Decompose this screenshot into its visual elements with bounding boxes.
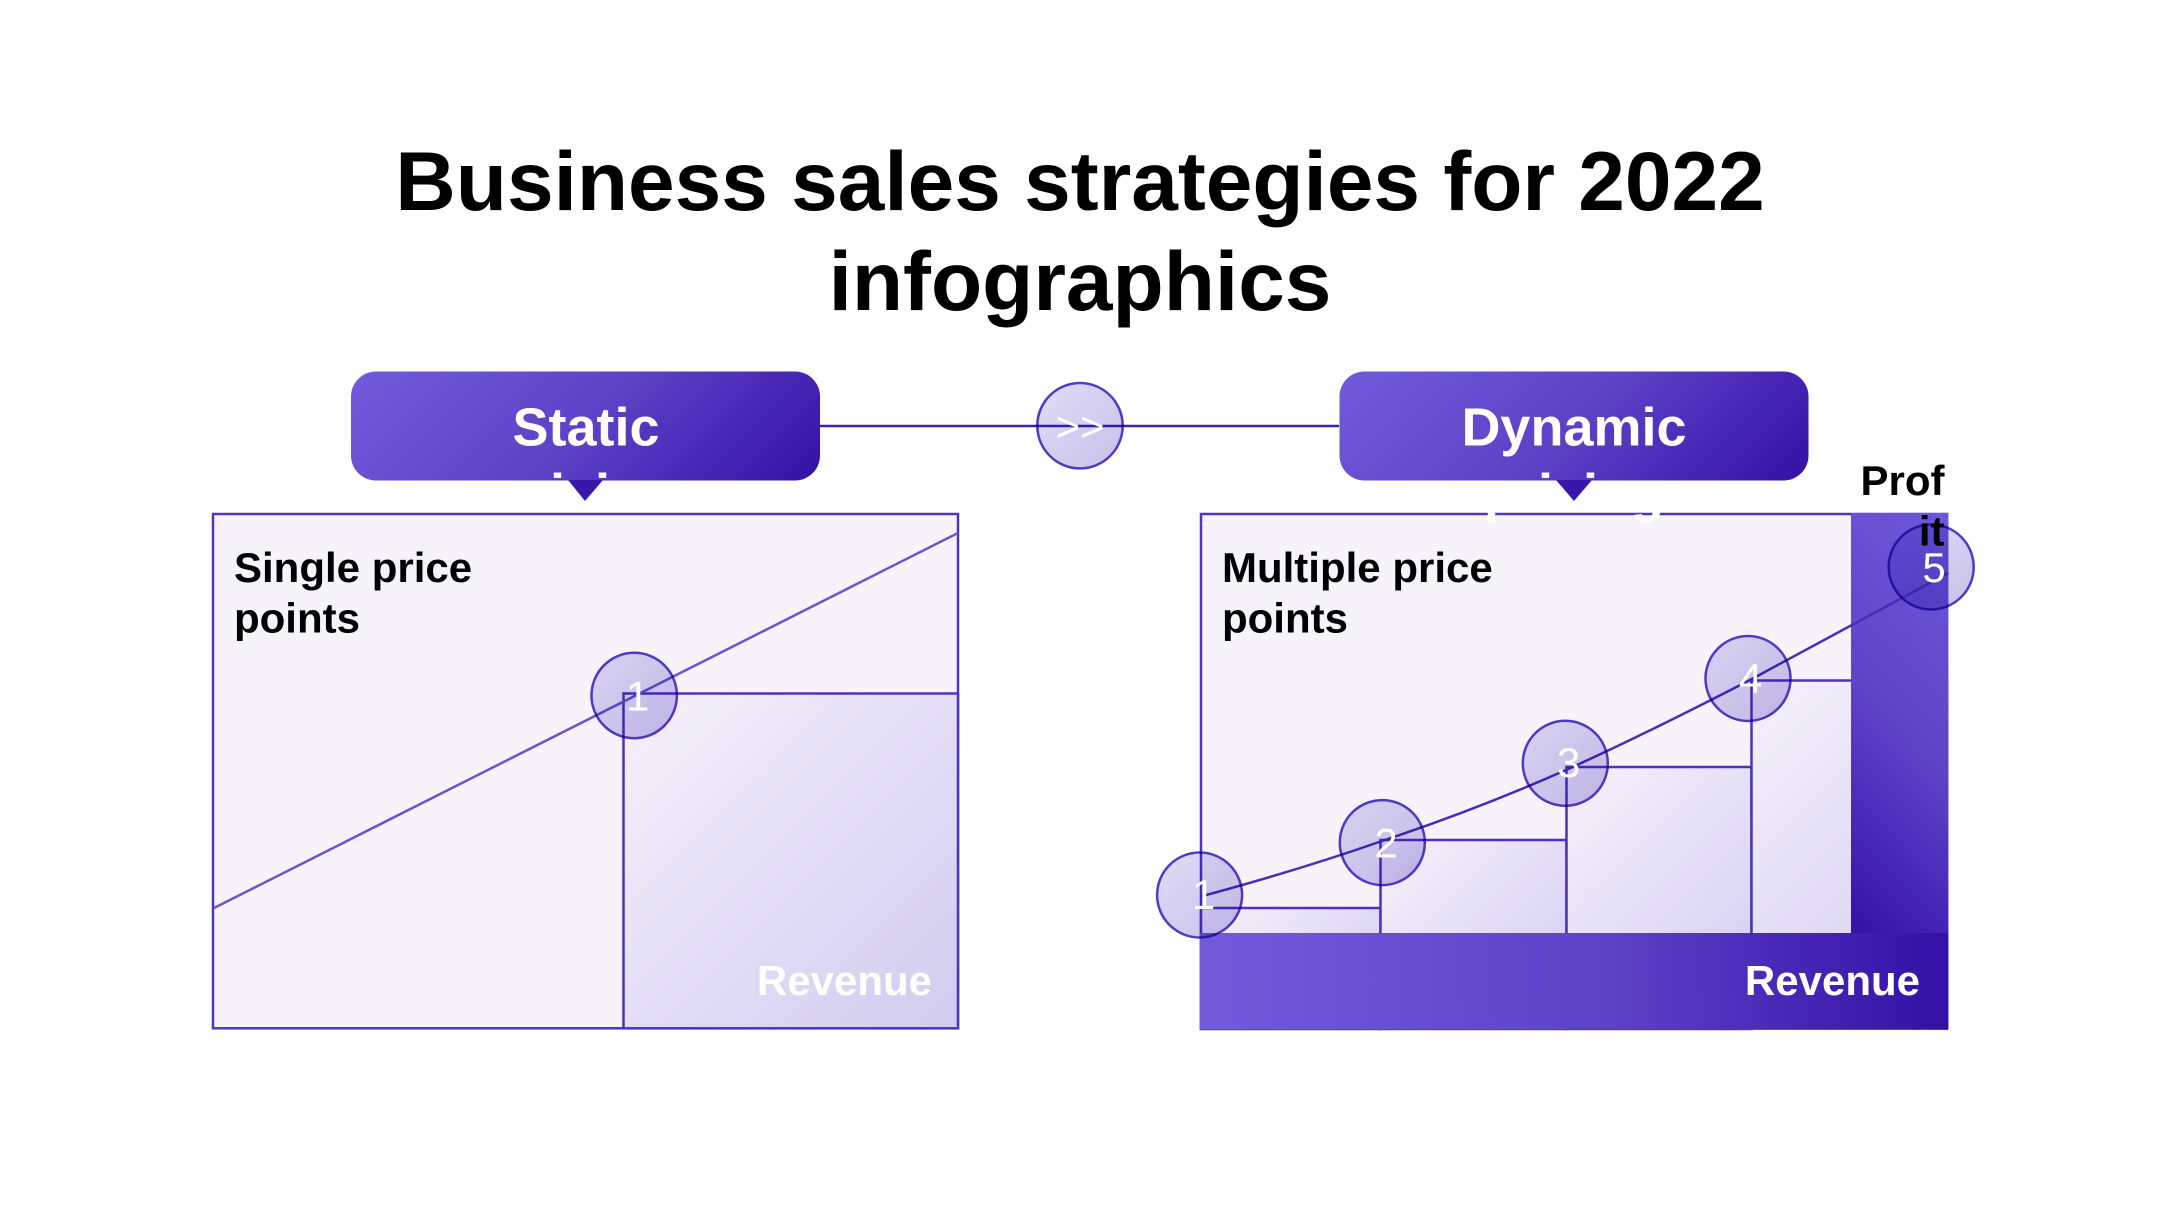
header: Dynamic pricing: pricing xyxy=(1484,464,1664,524)
marker numbers: 1 xyxy=(1192,871,1215,918)
marker 1 xyxy=(592,653,677,738)
label: profit: it xyxy=(1919,508,1945,554)
header: Dynamic pricing xyxy=(1340,372,1808,524)
label: single price points: points xyxy=(234,594,360,641)
panel: static pricing chart xyxy=(213,514,958,1028)
connector line with arrow badge xyxy=(820,383,1339,468)
profit column xyxy=(1851,513,1948,933)
label: single price points: Single price xyxy=(234,544,472,591)
header: Static pricing: pricing xyxy=(496,464,676,524)
marker numbers: 3 xyxy=(1557,739,1580,786)
demand line xyxy=(214,533,958,908)
header: Dynamic pricing: Dynamic xyxy=(1461,398,1687,458)
marker numbers xyxy=(1192,544,1946,918)
label: profit: Prof xyxy=(1860,457,1946,504)
title: Business sales strategies for 2022 xyxy=(395,134,1765,228)
marker numbers: 5 xyxy=(1922,544,1946,591)
marker numbers: 4 xyxy=(1739,655,1762,702)
title xyxy=(395,134,1765,328)
revenue steps xyxy=(1201,680,1947,1029)
header: Static pricing xyxy=(351,372,820,524)
panel: static pricing chart: 1 xyxy=(626,672,649,720)
marker numbers: 2 xyxy=(1374,820,1398,866)
label: revenue: Revenue xyxy=(1745,957,1920,1004)
connector line with arrow badge: >> xyxy=(1055,403,1105,450)
label: multiple price points: Multiple price xyxy=(1222,544,1493,591)
markers xyxy=(1157,524,1974,938)
header: Static pricing: Static xyxy=(512,398,660,458)
title: infographics xyxy=(829,234,1331,328)
revenue bar xyxy=(1200,933,1948,1030)
label: revenue: Revenue xyxy=(757,957,932,1004)
label: multiple price points: points xyxy=(1222,594,1348,641)
panel: dynamic pricing chart xyxy=(1157,457,1974,1030)
revenue area xyxy=(624,694,958,1028)
demand curve xyxy=(1200,573,1948,897)
